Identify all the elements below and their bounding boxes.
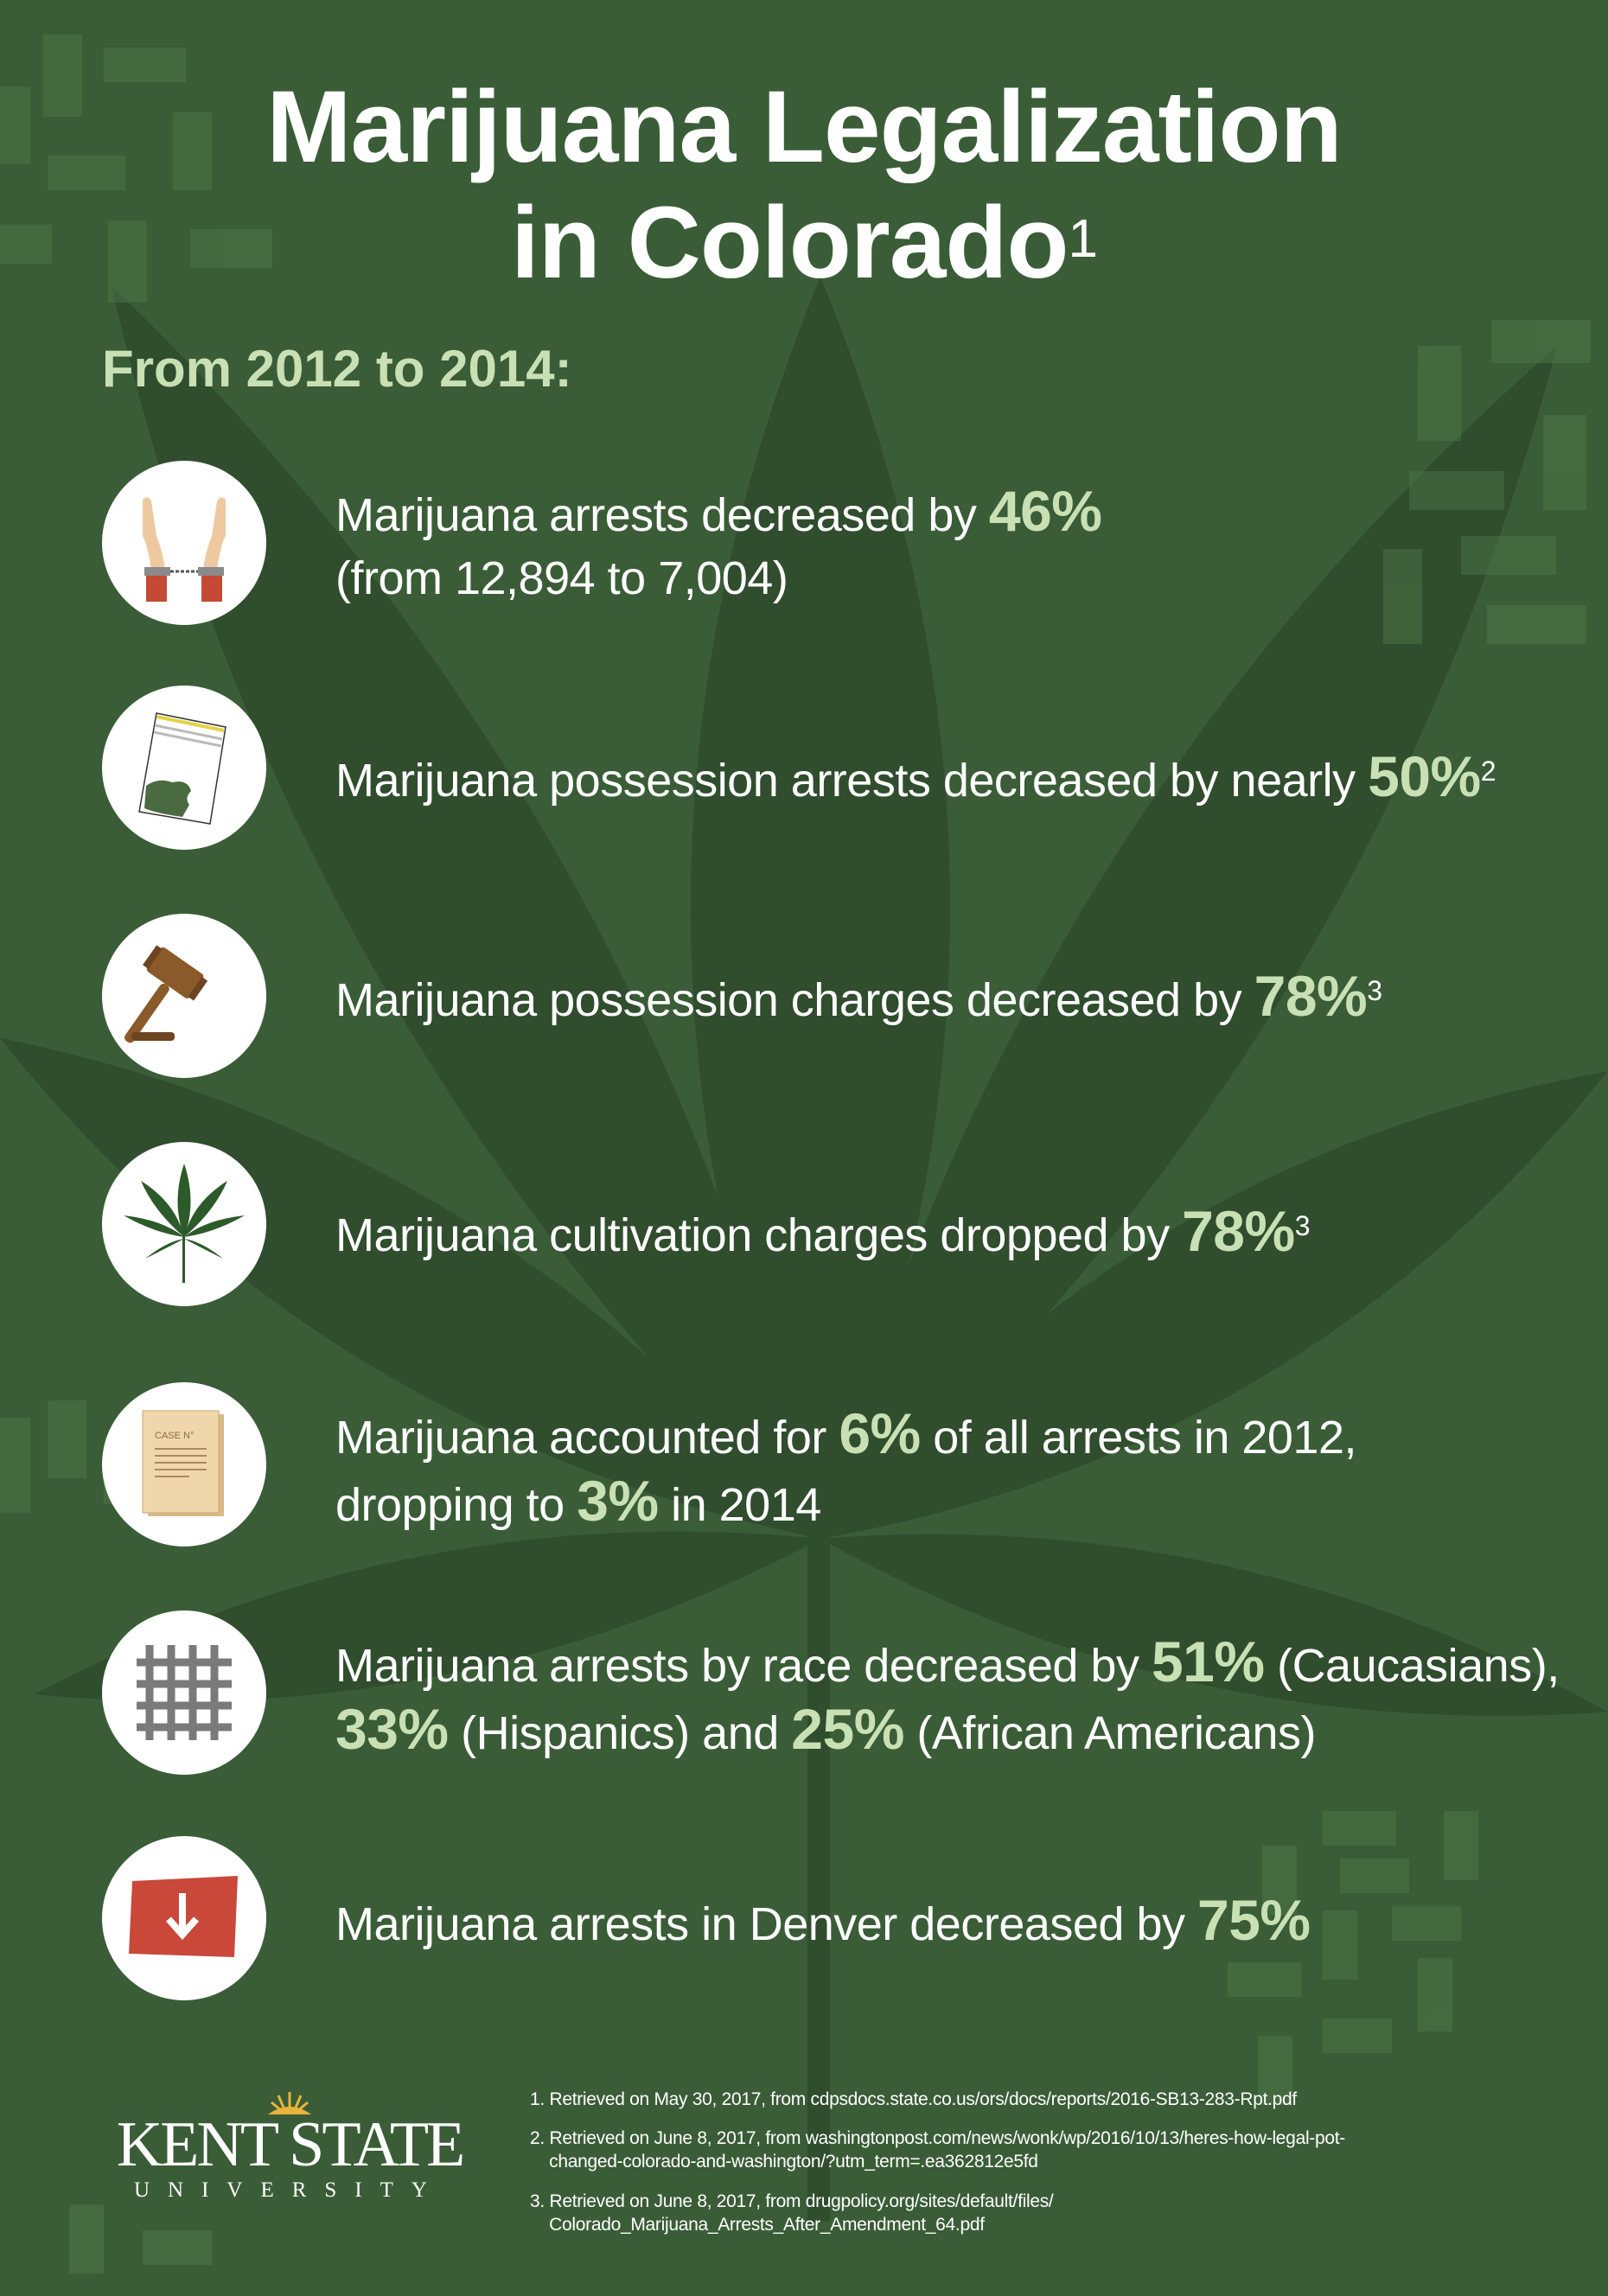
text: race: Marijuana arrests by race decreased by 51% (Caucasians), bbox=[335, 1630, 1560, 1693]
logo: Kent State: KENT STATE bbox=[117, 2109, 463, 2180]
text: denver: Marijuana arrests in Denver decreased by 75% bbox=[335, 1888, 1311, 1952]
text: share of arrests: Marijuana accounted for 6% of all arrests in 2012, bbox=[335, 1401, 1356, 1465]
icon: leaf bbox=[102, 1142, 266, 1306]
logo: Kent State bbox=[117, 2092, 463, 2202]
text: arrests: Marijuana arrests decreased by 46% bbox=[335, 479, 1101, 543]
text: 3. Retrieved on June 8, 2017, from drugpolicy.org/sites/default/files/ bbox=[530, 2191, 1053, 2211]
text: possession charges: Marijuana possession charges decreased by 78%3 bbox=[335, 964, 1382, 1028]
title: in Colorado1 bbox=[511, 186, 1097, 300]
title: Marijuana Legalization bbox=[266, 70, 1342, 184]
icon: bag bbox=[102, 686, 266, 850]
text: changed-colorado-and-washington/?utm_term=.ea362812e5fd bbox=[549, 2152, 1038, 2172]
subtitle: From 2012 to 2014: bbox=[102, 340, 572, 398]
text: share of arrests: dropping to 3% in 2014 bbox=[335, 1469, 821, 1533]
footnotes: 1. Retrieved on May 30, 2017, from cdpsdocs.state.co.us/ors/docs/reports/2016-SB13-283-Rpt.pdf bbox=[530, 2089, 1297, 2109]
icon: colorado arrow bbox=[102, 1836, 266, 2000]
text: share of arrests bbox=[335, 1401, 1356, 1533]
text: possession arrests: Marijuana possession arrests decreased by nearly 50%2 bbox=[335, 744, 1496, 808]
text: race bbox=[335, 1630, 1560, 1761]
icon: gavel bbox=[102, 914, 266, 1078]
text: Colorado_Marijuana_Arrests_After_Amendment_64.pdf bbox=[549, 2215, 985, 2235]
text: arrests bbox=[335, 479, 1101, 604]
title bbox=[266, 70, 1342, 300]
text: cultivation: Marijuana cultivation charges dropped by 78%3 bbox=[335, 1199, 1310, 1263]
icon: case file: CASE N° bbox=[155, 1431, 194, 1441]
text: race: 33% (Hispanics) and 25% (African Americans) bbox=[335, 1697, 1316, 1761]
icon: jail bars bbox=[102, 1610, 266, 1775]
text: 2. Retrieved on June 8, 2017, from washingtonpost.com/news/wonk/wp/2016/10/13/heres-how-legal-pot- bbox=[530, 2128, 1345, 2148]
icon: handcuffs bbox=[102, 461, 266, 625]
logo: Kent State: UNIVERSITY bbox=[134, 2178, 445, 2202]
text: arrests: (from 12,894 to 7,004) bbox=[335, 552, 788, 604]
icon: case file bbox=[102, 1382, 266, 1547]
icon: sun bbox=[268, 2092, 311, 2114]
